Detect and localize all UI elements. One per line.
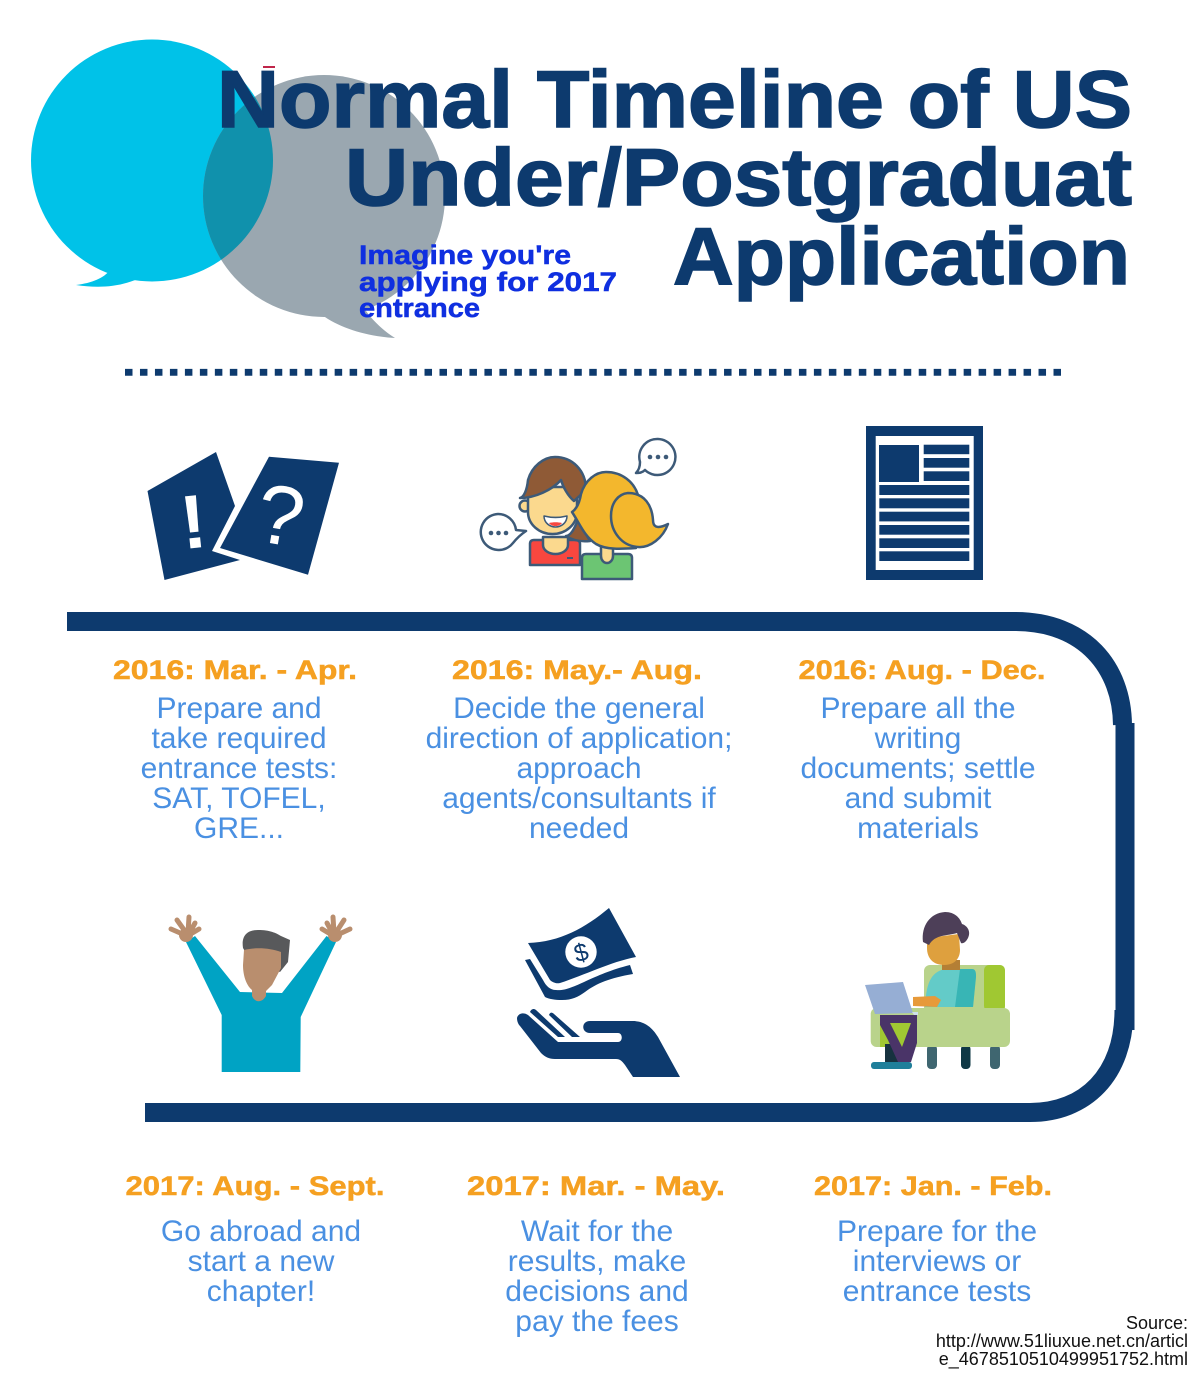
title: Normal Timeline of US bbox=[217, 55, 1132, 145]
icon: exclamation and question documents: ! bbox=[176, 479, 210, 566]
timeline track bbox=[67, 622, 1125, 1112]
step: 2017 Mar - May: results, make bbox=[508, 1245, 686, 1278]
step: 2016 Aug - Dec: writing bbox=[874, 722, 961, 755]
source note: e_4678510510499951752.html bbox=[939, 1349, 1188, 1370]
title bbox=[217, 55, 1132, 302]
step: 2016 Aug - Dec: and submit bbox=[845, 782, 992, 815]
step: 2017 Jan - Feb: interviews or bbox=[853, 1245, 1021, 1278]
step: 2016 Mar - Apr bbox=[113, 655, 357, 845]
step: 2017 Mar - May: Wait for the bbox=[521, 1215, 673, 1248]
step: 2016 May - Aug: Decide the general bbox=[453, 692, 705, 725]
step: 2016 Mar - Apr: entrance tests: bbox=[141, 752, 337, 785]
source note bbox=[936, 1313, 1188, 1370]
step: 2016 May - Aug: needed bbox=[529, 812, 629, 845]
step: 2016 Mar - Apr: Prepare and bbox=[156, 692, 322, 725]
step: 2016 May - Aug: approach bbox=[516, 752, 642, 785]
step: 2016 May - Aug: direction of application; bbox=[426, 722, 732, 755]
source note: Source: bbox=[1126, 1313, 1188, 1333]
step: 2016 Aug - Dec: 2016: Aug. - Dec. bbox=[798, 655, 1046, 685]
step: 2016 Aug - Dec: materials bbox=[857, 812, 979, 845]
step: 2016 Mar - Apr: take required bbox=[151, 722, 327, 755]
icon: person cheering bbox=[171, 917, 350, 1072]
step: 2016 Mar - Apr: GRE... bbox=[194, 812, 284, 845]
step: 2016 Mar - Apr: SAT, TOFEL, bbox=[152, 782, 326, 815]
step: 2016 Aug - Dec: Prepare all the bbox=[820, 692, 1016, 725]
title: Application bbox=[673, 212, 1130, 302]
icon: person with laptop on sofa bbox=[865, 912, 1010, 1069]
icon: money over open hand: $ bbox=[571, 938, 592, 968]
step: 2016 May - Aug bbox=[426, 655, 732, 845]
step: 2017 Aug - Sept: 2017: Aug. - Sept. bbox=[126, 1171, 384, 1201]
step: 2017 Aug - Sept: chapter! bbox=[207, 1275, 315, 1308]
icon: exclamation and question documents: ? bbox=[249, 465, 312, 566]
step: 2016 Mar - Apr: 2016: Mar. - Apr. bbox=[113, 655, 357, 685]
step: 2017 Mar - May bbox=[467, 1171, 725, 1338]
step: 2017 Aug - Sept bbox=[126, 1171, 384, 1308]
subtitle: entrance bbox=[359, 293, 480, 323]
step: 2017 Aug - Sept: Go abroad and bbox=[161, 1215, 361, 1248]
step: 2016 Aug - Dec: documents; settle bbox=[800, 752, 1036, 785]
step: 2017 Jan - Feb: entrance tests bbox=[843, 1275, 1031, 1308]
icon: money over open hand bbox=[517, 908, 680, 1077]
step: 2017 Aug - Sept: start a new bbox=[188, 1245, 335, 1278]
icon: overlapping speech bubbles bbox=[31, 40, 445, 338]
step: 2017 Mar - May: 2017: Mar. - May. bbox=[467, 1171, 725, 1201]
step: 2016 May - Aug: agents/consultants if bbox=[442, 782, 716, 815]
step: 2017 Jan - Feb: Prepare for the bbox=[837, 1215, 1037, 1248]
step: 2016 May - Aug: 2016: May.- Aug. bbox=[452, 655, 702, 685]
step: 2017 Mar - May: decisions and bbox=[505, 1275, 689, 1308]
source note: http://www.51liuxue.net.cn/articl bbox=[936, 1331, 1188, 1351]
step: 2017 Mar - May: pay the fees bbox=[515, 1305, 679, 1338]
step: 2017 Jan - Feb: 2017: Jan. - Feb. bbox=[814, 1171, 1052, 1201]
icon: exclamation and question documents bbox=[148, 452, 339, 580]
subtitle: Imagine you're bbox=[359, 240, 571, 270]
step: 2017 Jan - Feb bbox=[814, 1171, 1052, 1308]
subtitle: applying for 2017 bbox=[359, 267, 617, 297]
icon: two people talking bbox=[481, 439, 675, 579]
subtitle bbox=[359, 240, 617, 323]
title: Under/Postgraduat bbox=[345, 133, 1132, 223]
step: 2016 Aug - Dec bbox=[798, 655, 1046, 845]
icon: document bbox=[866, 426, 983, 580]
